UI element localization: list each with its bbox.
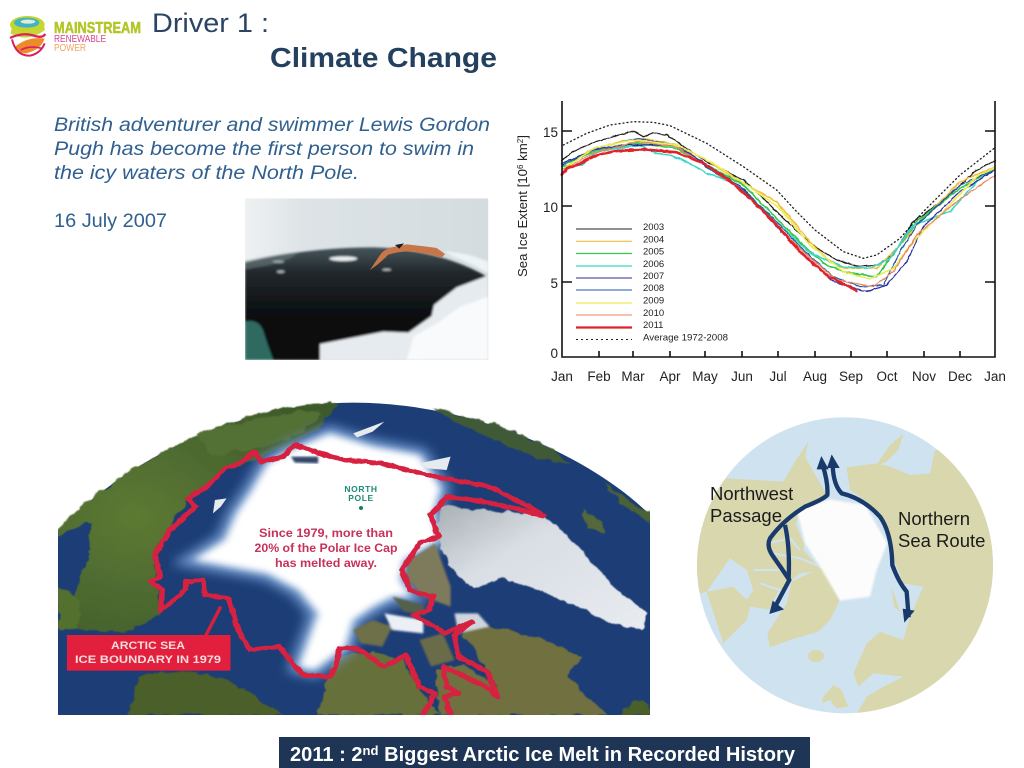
- chart legend: 2003: [643, 222, 664, 233]
- text block: swim caption: the icy waters of the North Pole.: [54, 163, 359, 184]
- title: Driver 1 :: [152, 8, 269, 38]
- chart legend: 2011: [643, 320, 663, 331]
- ice melt note: Since 1979, more than: [259, 528, 393, 540]
- land: taymyr dark ridge: [197, 410, 322, 457]
- land: novaya zemlya: [892, 587, 900, 612]
- chart legend: 2005: [643, 246, 664, 258]
- line chart: sea ice extent: [515, 101, 1006, 384]
- route: northwest passage: [769, 465, 909, 617]
- logo wordmark: RENEWABLE: [54, 34, 106, 45]
- curve: 2011: [562, 149, 857, 291]
- y axis title: 6: [516, 164, 525, 169]
- curve: 2003: [562, 131, 995, 266]
- chart legend: 2004: [643, 234, 664, 246]
- sea ice cap: [194, 433, 441, 670]
- footer banner: Biggest Arctic Ice Melt in Recorded History: [379, 744, 796, 766]
- x axis labels: May: [692, 369, 718, 384]
- chart legend: Average 1972-2008: [643, 332, 728, 344]
- sea: arctic archipelago channels: [753, 523, 820, 610]
- photo: swimmer diving into polar water: [245, 198, 488, 360]
- route labels: Passage: [710, 505, 782, 526]
- x axis labels: Oct: [876, 369, 898, 384]
- footer banner: 2011 : 2: [290, 744, 362, 766]
- curve: 2008: [562, 138, 995, 287]
- land: eurasia: [847, 443, 1000, 720]
- circular polar map: [690, 410, 1000, 720]
- y axis title: Sea Ice Extent [10: [515, 171, 530, 277]
- land: british isles: [822, 685, 848, 708]
- north pole label: NORTH: [344, 484, 378, 494]
- chart legend: 2007: [643, 271, 664, 282]
- greenland: [437, 507, 647, 630]
- route labels: [710, 483, 985, 551]
- x axis labels: [551, 369, 1006, 384]
- curve: 2009: [562, 140, 995, 279]
- map: arctic shipping routes: [690, 410, 1000, 720]
- y axis labels: 5: [550, 276, 558, 291]
- title: Climate Change: [270, 42, 497, 73]
- chart legend: 2008: [643, 283, 664, 294]
- x axis labels: Mar: [621, 369, 645, 384]
- x axis labels: Jun: [731, 369, 753, 384]
- canadian arctic islands: [353, 597, 490, 667]
- land: greenland: [767, 567, 840, 647]
- y axis labels: 15: [543, 125, 558, 140]
- callout: arctic sea ice boundary: ARCTIC SEA: [111, 640, 185, 652]
- y axis title: 2: [516, 138, 525, 143]
- logo wordmark: MAINSTREAM: [54, 20, 141, 37]
- footer banner: [279, 737, 810, 768]
- swimmer: [370, 244, 445, 270]
- land: canada mainland: [318, 652, 439, 715]
- ice melt note: has melted away.: [275, 558, 377, 570]
- land: far north coast: [431, 408, 571, 463]
- curve: 2005: [562, 143, 995, 277]
- chart legend: 2010: [643, 308, 664, 319]
- x axis labels: Nov: [912, 369, 936, 384]
- y axis labels: 0: [550, 346, 558, 361]
- route labels: Northwest: [710, 483, 793, 504]
- islands: [291, 457, 318, 463]
- y axis labels: [543, 125, 558, 361]
- satellite globe: [49, 403, 650, 715]
- curve: average 1972-2008: [563, 122, 995, 258]
- north pole label: [344, 484, 378, 510]
- sea: hudson bay: [707, 558, 753, 600]
- x axis labels: Apr: [659, 369, 681, 384]
- land: north america: [690, 442, 828, 643]
- land: kamchatka arc: [877, 434, 904, 464]
- logo: [10, 16, 141, 56]
- x axis labels: Feb: [587, 369, 611, 384]
- route: northern sea route: [833, 465, 909, 617]
- x axis labels: Jul: [769, 369, 787, 384]
- x axis labels: Dec: [948, 369, 972, 384]
- y axis title: km: [515, 143, 530, 165]
- callout: arctic sea ice boundary: ICE BOUNDARY IN 1979: [75, 654, 221, 666]
- logo wordmark: POWER: [54, 43, 86, 54]
- curve: 2007: [562, 145, 995, 292]
- land: lower left: [127, 670, 283, 715]
- callout leader: [205, 607, 221, 637]
- route labels: Northern: [898, 508, 970, 529]
- ice melt note: 20% of the Polar Ice Cap: [254, 543, 398, 555]
- polar ice cap: [797, 499, 887, 601]
- y axis title: ]: [515, 135, 530, 139]
- text block: swim caption: [54, 115, 490, 232]
- x axis labels: Sep: [839, 369, 863, 384]
- ice boundary line 1979: [151, 445, 543, 715]
- arrowheads: [769, 454, 915, 623]
- ice melt note: [254, 528, 398, 570]
- title: [152, 8, 497, 73]
- callout: arctic sea ice boundary: [75, 640, 221, 666]
- ellesmere land: [406, 543, 451, 607]
- chart legend: 2006: [643, 259, 664, 270]
- footer banner: nd: [363, 743, 379, 758]
- land: siberia: [49, 403, 338, 632]
- text block: swim caption: Pugh has become the first person to swim in: [54, 139, 474, 160]
- y axis labels: 10: [543, 200, 558, 215]
- text block: swim caption: 16 July 2007: [54, 211, 167, 232]
- land: iceland: [808, 650, 824, 662]
- curve: 2004: [562, 138, 995, 268]
- curve: 2010: [562, 142, 995, 287]
- curve: 2006: [562, 145, 995, 268]
- chart legend: 2009: [643, 296, 664, 306]
- route labels: Sea Route: [898, 530, 985, 551]
- chart legend: [576, 222, 728, 344]
- chart axes: [562, 101, 995, 357]
- icon: logo globe: [10, 16, 45, 56]
- north pole label: POLE: [348, 493, 374, 503]
- x axis labels: Aug: [803, 369, 827, 384]
- chart curves: [562, 122, 995, 292]
- text block: swim caption: British adventurer and swimmer Lewis Gordon: [54, 115, 490, 136]
- x axis labels: Jan: [551, 369, 573, 384]
- map: arctic sea ice satellite view: [49, 403, 650, 715]
- logo wordmark: [54, 20, 141, 54]
- x axis labels: Jan: [984, 369, 1006, 384]
